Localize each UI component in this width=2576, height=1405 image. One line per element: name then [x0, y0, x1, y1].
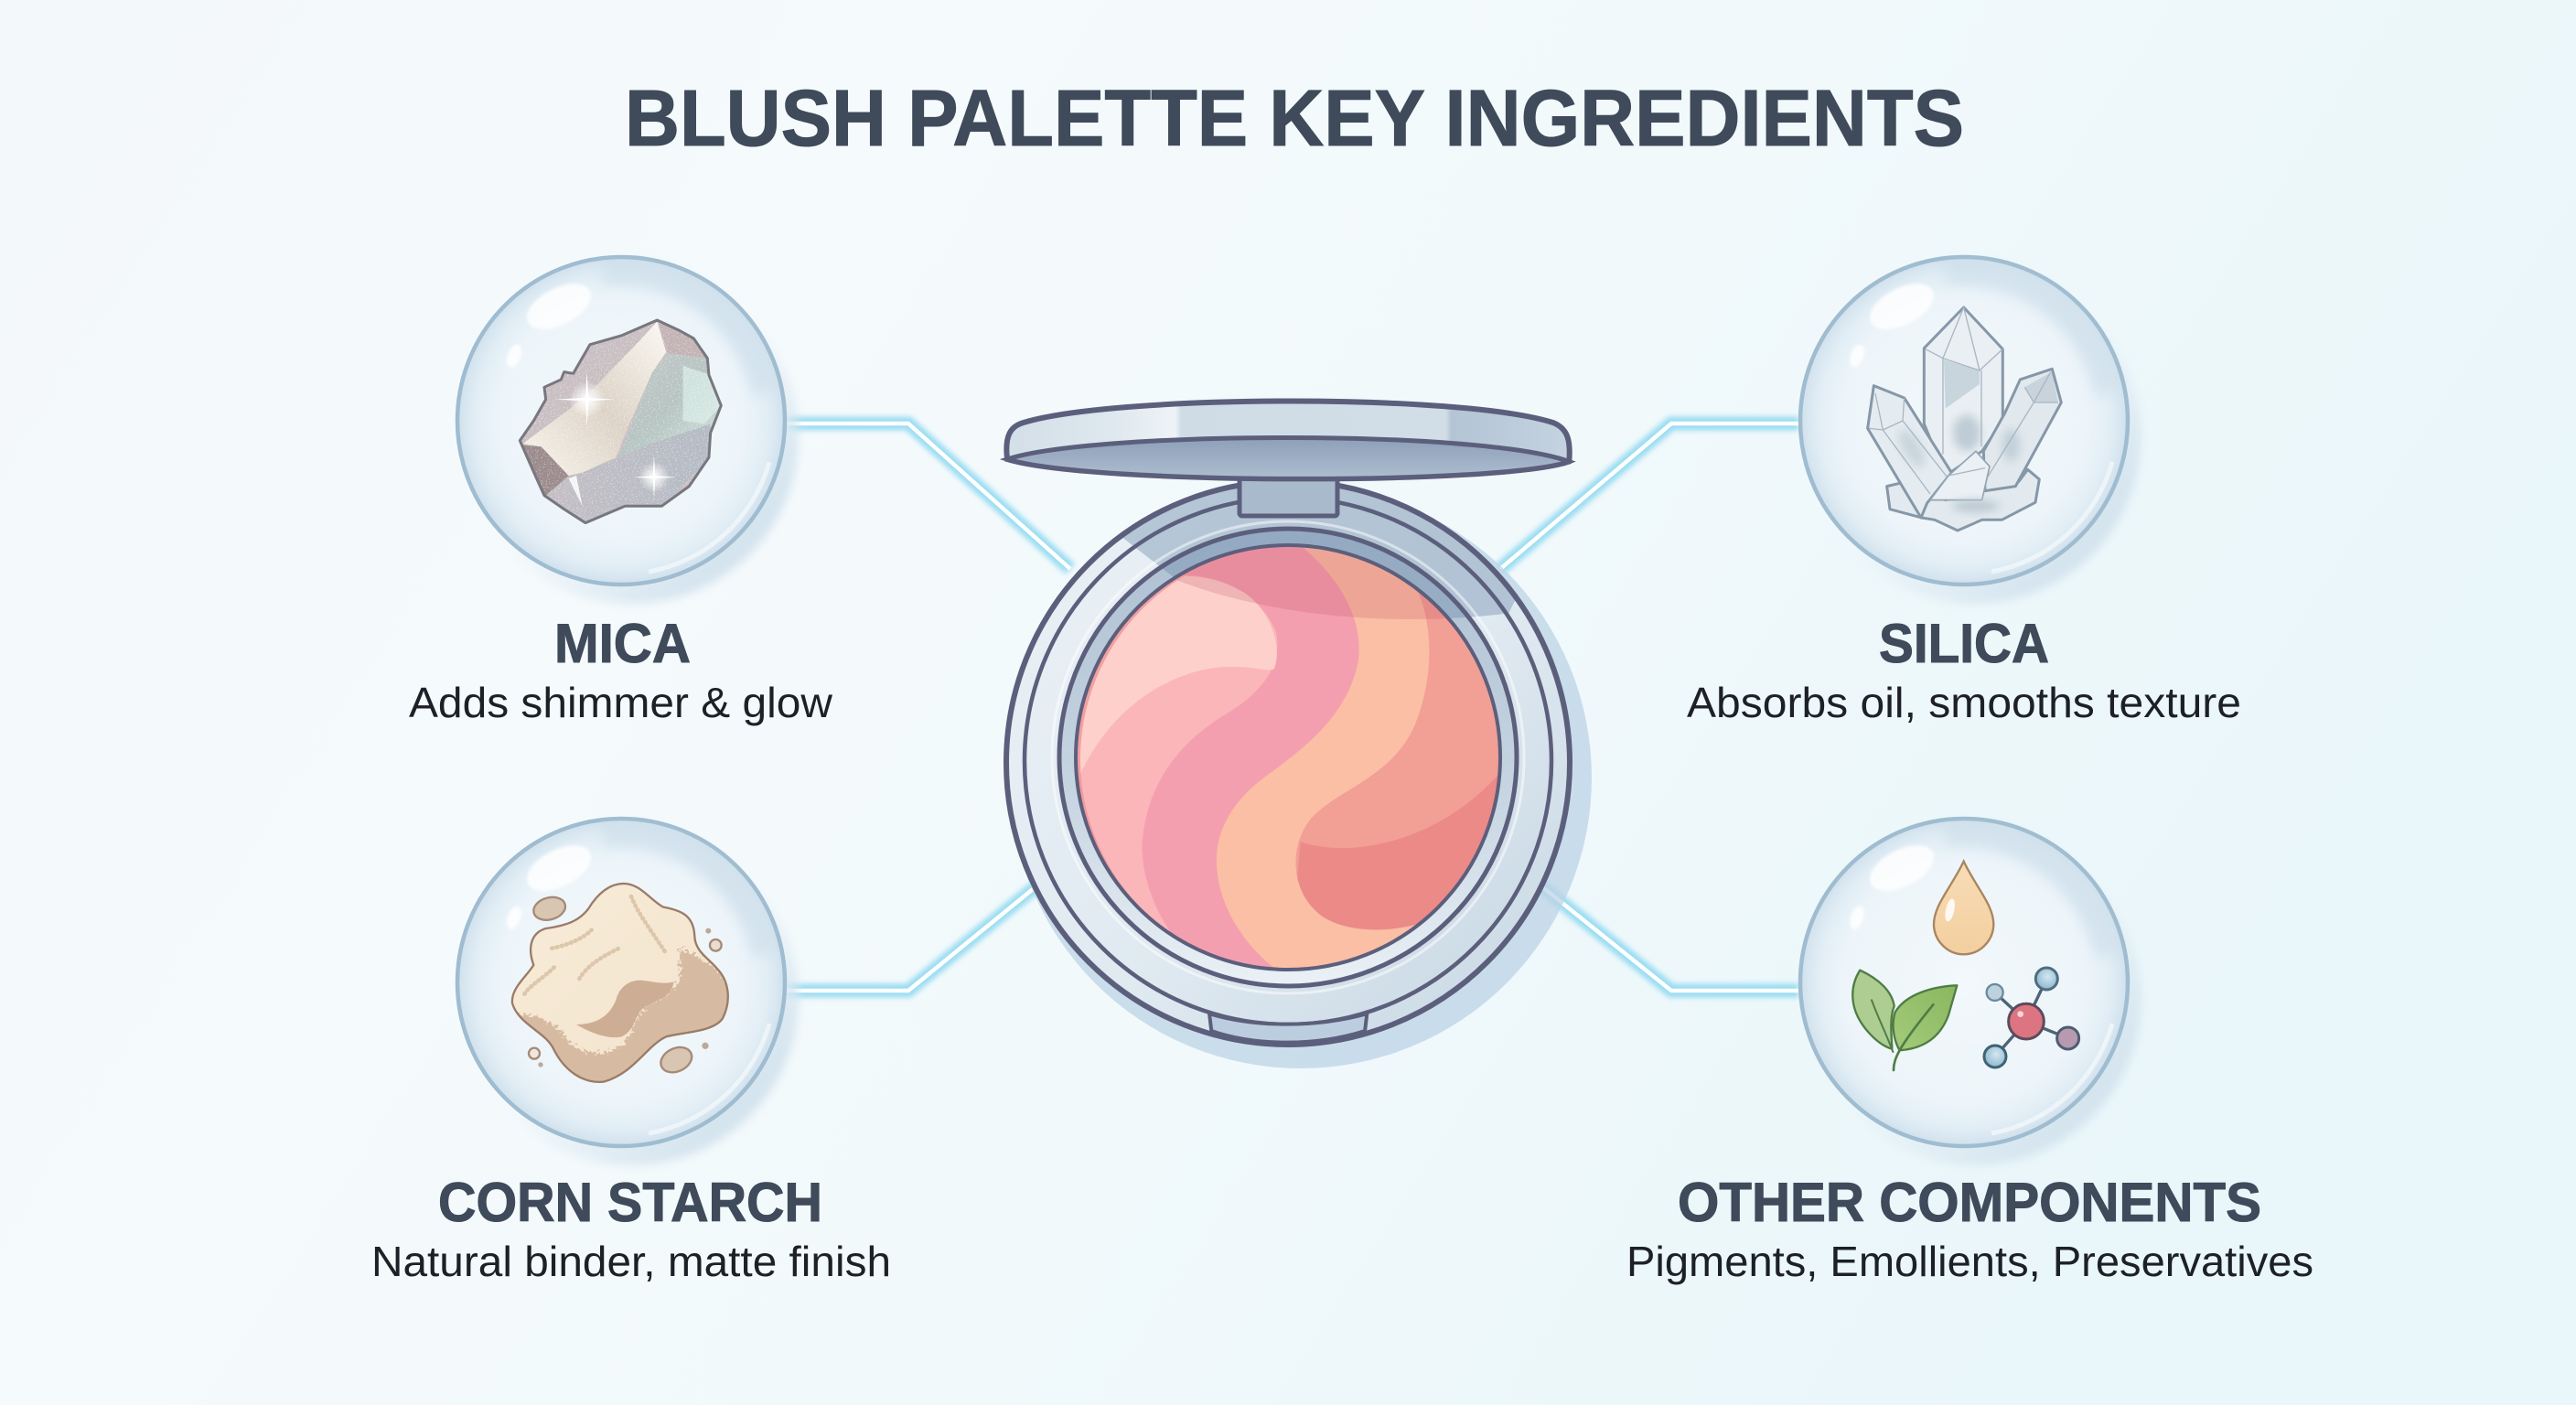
open mirror lid [1006, 402, 1570, 478]
blush pan with swirls [1078, 547, 1498, 968]
label: mica: Adds shimmer & glow [409, 679, 833, 726]
icon: corn starch powder [512, 884, 734, 1089]
icon: green leaves [1852, 971, 1957, 1070]
title: BLUSH PALETTE KEY INGREDIENTS [625, 74, 1964, 163]
icon: mica mineral [515, 317, 725, 528]
label: mica: MICA [554, 613, 691, 674]
label: mica [409, 613, 833, 726]
label: corn starch: CORN STARCH [438, 1172, 822, 1233]
label: silica [1687, 613, 2241, 726]
compact ring body [1006, 436, 1570, 1045]
ingredient bubble: silica [1800, 257, 2141, 604]
label: other components: Pigments, Emollients, Preservatives [1626, 1238, 2313, 1285]
label: silica: SILICA [1879, 613, 2049, 674]
connectors: glowing lines from bubbles to compact [787, 424, 1798, 991]
label: other components [1626, 1172, 2313, 1285]
bottom latch [1209, 1014, 1367, 1043]
icon: quartz crystal cluster [1868, 307, 2061, 531]
ingredient bubble: mica [457, 257, 799, 604]
label: silica: Absorbs oil, smooths texture [1687, 679, 2241, 726]
icon: molecule [1984, 968, 2079, 1067]
central blush compact [970, 402, 1592, 1068]
label: other components: OTHER COMPONENTS [1678, 1172, 2261, 1233]
label: corn starch [371, 1172, 891, 1285]
sparkles [555, 372, 677, 499]
ingredient bubble: other components [1800, 819, 2141, 1165]
compact shadow [1010, 487, 1592, 1068]
hinge [1240, 477, 1337, 516]
label: corn starch: Natural binder, matte finish [371, 1238, 891, 1285]
powder crumbs [529, 894, 722, 1078]
ingredient bubble: corn starch [457, 819, 799, 1165]
icon: oil droplet [1934, 862, 1993, 954]
